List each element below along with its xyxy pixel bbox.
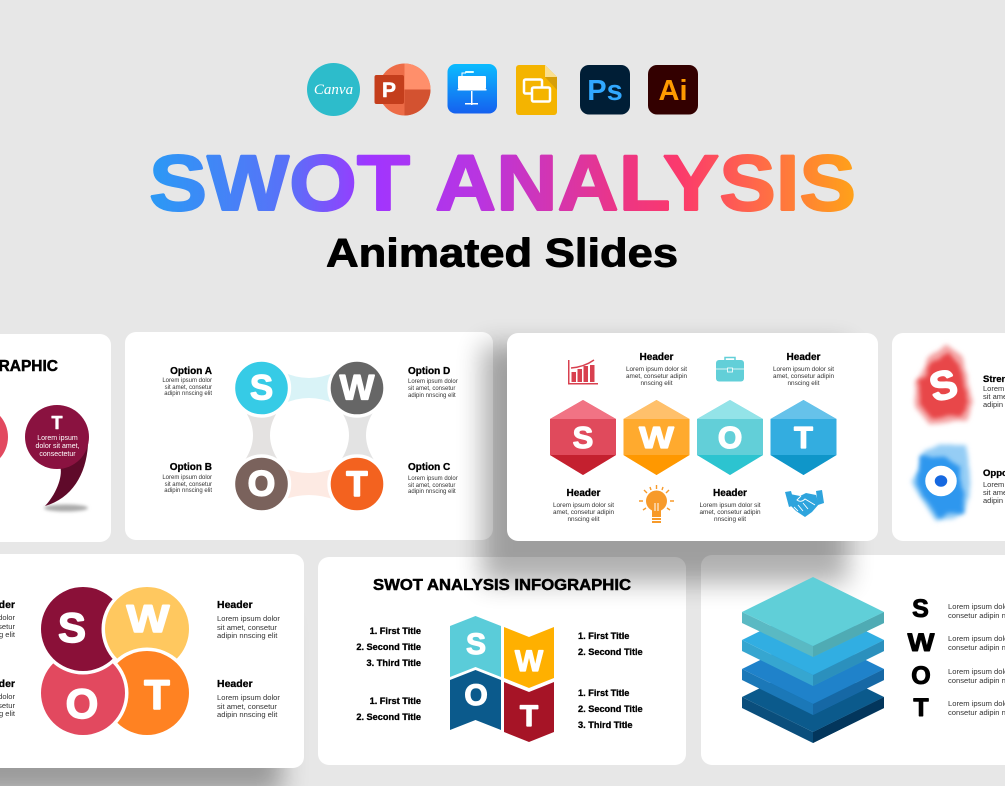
right lists: 2. Second Title [578,704,643,714]
circle W [329,360,385,416]
text blocks: amet, consetur adipin [626,373,687,380]
ribbons: T [520,700,538,733]
T bubble: dolor sit amet, [36,443,80,450]
circle S [234,360,290,416]
heading: SWOT ANALYSIS INFOGRAPHIC [373,577,631,594]
opportunities text [983,468,1005,505]
circle S: S [250,368,273,408]
overlapping circles SWOT: T [144,671,170,718]
title: SWOT [149,138,410,227]
left lists: 2. Second Title [356,642,421,652]
ribbons [450,616,554,742]
icon: Photoshop: Ps [587,75,623,107]
option labels: Lorem ipsum dolor [408,476,458,482]
title: ANALYSIS [435,138,856,227]
panel: hexagon slide [507,333,878,541]
option labels: sit amet, consetur [408,483,455,489]
text blocks: Lorem ipsum dolor sit [553,502,614,509]
panel: speech bubble slide [0,334,111,542]
app icons row [307,63,698,116]
hexagon S [550,400,616,475]
option labels: adipin nnscing elit [164,391,212,397]
option labels: Lorem ipsum dolor [408,379,458,385]
text blocks: Lorem ipsum dolor sit [699,502,761,509]
text blocks: Header [567,488,601,499]
right lists: 3. Third Title [578,720,632,730]
text blocks: nnscing elit [788,380,820,387]
red brush S [916,346,972,425]
SWOT letters: O [911,662,931,690]
connectors [245,372,374,500]
right text blocks: Lorem ipsum dolor [217,693,280,702]
T bubble: consectetur [39,451,76,458]
circle O: O [248,464,275,504]
left text blocks [0,599,16,718]
circle T [329,456,385,512]
option labels: sit amet, consetur [165,385,212,391]
SWOT letters: S [912,595,929,623]
right text blocks: adipin nnscing elit [217,631,278,640]
SWOT letters [908,595,935,722]
hexagon W: W [639,420,675,455]
icon: Keynote [448,64,497,114]
icon: handshake [785,490,824,517]
text blocks: Header [640,352,674,363]
circle O [234,456,290,512]
hexagon O [697,400,763,475]
icon: PowerPoint [374,64,430,116]
hexagon O: O [718,420,742,455]
T bubble: Lorem ipsum [37,435,78,442]
layer descriptions [948,602,1005,717]
option labels: sit amet, consetur [408,386,455,392]
option labels: adipin nnscing elit [164,488,212,494]
right lists: 2. Second Title [578,647,643,657]
shadow under bubble [44,504,88,512]
right text blocks: adipin nnscing elit [217,710,278,719]
ribbons: S [466,628,486,661]
option labels: adipin nnscing elit [408,489,456,495]
circle W: W [340,368,374,408]
left lists: 3. Third Title [367,658,421,668]
text blocks: Lorem ipsum dolor sit [773,366,834,373]
text blocks: amet, consetur adipin [553,509,614,516]
text blocks: nnscing elit [568,516,600,523]
ribbons: O [464,679,488,712]
icon: Canva [307,63,360,116]
overlapping circles SWOT: O [66,680,98,727]
hexagon T [770,400,836,475]
SWOT letters: W [908,629,935,657]
icon: lightbulb [639,485,674,523]
overlapping circles SWOT: W [126,598,170,641]
right text blocks: sit amet, consetur [217,623,277,632]
icon: Photoshop [580,65,630,114]
SWOT letters: T [913,694,929,722]
red brush S: S [925,361,962,411]
icon: briefcase [716,358,744,382]
panel: radial diagram slide bottom left [0,587,280,735]
left lists [356,626,421,722]
option labels: Lorem ipsum dolor [162,475,212,481]
text blocks: amet, consetur adipin [699,509,761,516]
text blocks: amet, consetur adipin [773,373,834,380]
icon: PowerPoint: P [382,79,396,102]
icon: Canva: Canva [314,82,353,98]
subtitle: Animated Slides [326,232,678,276]
T bubble: T [52,413,62,433]
option labels [162,366,458,495]
hexagon W [624,400,690,475]
text blocks [553,352,834,523]
icon: Google Slides [516,65,557,115]
right text blocks: Lorem ipsum dolor [217,614,280,623]
option labels: Option C [408,462,450,473]
right text blocks: sit amet, consetur [217,702,277,711]
right lists [578,631,643,730]
text blocks: Lorem ipsum dolor sit [626,366,687,373]
right lists: 1. First Title [578,688,629,698]
panel: watercolor slide [892,333,1005,541]
option labels: Option D [408,366,450,377]
option labels: Option B [170,462,212,473]
option labels: Option A [170,366,212,377]
strengths text [983,374,1005,409]
option labels: sit amet, consetur [165,482,212,488]
panel: four circles slide [125,332,493,540]
panel: stacked layers slide [701,555,1005,765]
overlapping circles SWOT: S [58,604,86,651]
panel: ribbon diagram slide [318,557,686,765]
red bubble [0,405,8,469]
right lists: 1. First Title [578,631,629,641]
hexagon S: S [573,420,593,455]
right text blocks: Header [217,599,253,611]
T bubble [25,405,89,506]
left lists: 1. First Title [370,626,421,636]
option labels: adipin nnscing elit [408,393,456,399]
title [149,138,856,227]
icon: Illustrator: Ai [658,75,688,107]
left lists: 1. First Title [370,696,421,706]
isometric layers [742,577,884,743]
text blocks: Header [787,352,821,363]
option labels: Lorem ipsum dolor [162,378,212,384]
text blocks: Header [713,488,747,499]
right text blocks: Header [217,678,253,690]
circle T: T [346,465,368,504]
slide backgrounds and cast shadows [0,332,1005,786]
icon: Illustrator [648,65,698,114]
icon: bar chart [568,360,598,384]
overlapping circles SWOT [38,584,192,738]
blue brush O [912,444,972,521]
text blocks: nnscing elit [714,516,746,523]
text blocks: nnscing elit [641,380,673,387]
left lists: 2. Second Title [356,712,421,722]
ribbons: W [515,645,544,678]
hexagon T: T [794,420,813,455]
right text blocks [217,599,280,719]
